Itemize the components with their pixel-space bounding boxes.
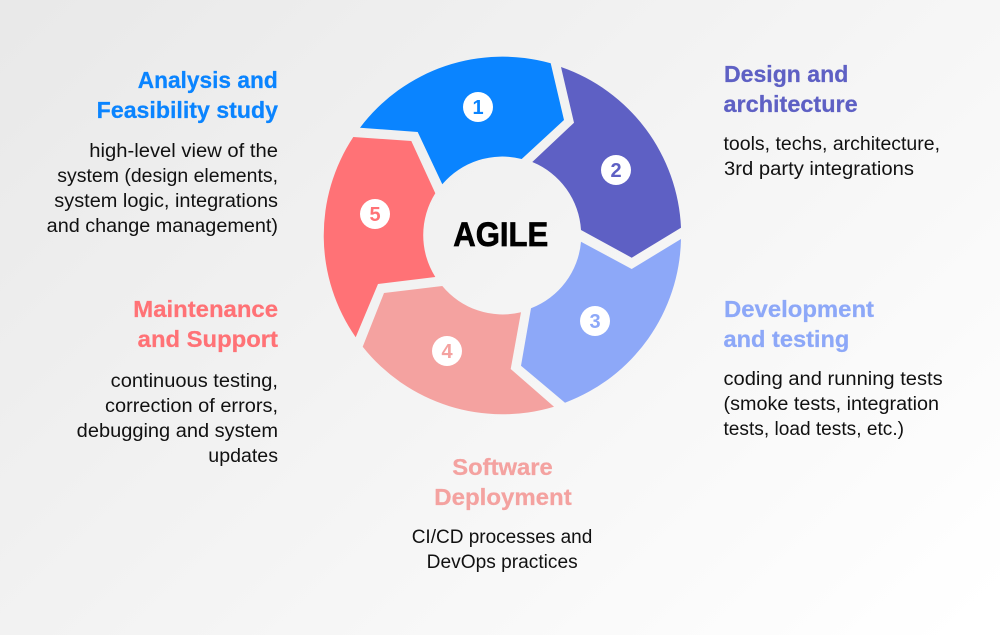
heading: deployment: Deployment bbox=[434, 484, 572, 510]
heading: design: Design and bbox=[724, 61, 848, 87]
body: deployment: DevOps practices bbox=[427, 552, 578, 573]
agile cycle diagram bbox=[324, 57, 681, 414]
heading: analysis bbox=[97, 67, 278, 123]
body: maintenance: updates bbox=[208, 446, 278, 467]
segment 3: development bbox=[521, 239, 681, 403]
body: analysis: system (design elements, bbox=[57, 166, 278, 187]
body: maintenance: correction of errors, bbox=[105, 396, 278, 417]
heading: analysis: Analysis and bbox=[138, 67, 278, 93]
body: maintenance bbox=[77, 371, 278, 467]
body: deployment bbox=[412, 527, 592, 573]
text block: software deployment bbox=[412, 454, 592, 573]
body: maintenance: continuous testing, bbox=[111, 371, 278, 392]
heading: deployment bbox=[434, 454, 572, 510]
heading: development: and testing bbox=[724, 326, 849, 352]
body: development: tests, load tests, etc.) bbox=[724, 419, 904, 440]
text block: development and testing bbox=[724, 296, 943, 440]
heading: maintenance: Maintenance bbox=[133, 296, 278, 322]
heading: development: Development bbox=[724, 296, 874, 322]
segment 3: development: 3 bbox=[589, 311, 601, 333]
segment 1: analysis: 1 bbox=[472, 97, 484, 119]
body: design: 3rd party integrations bbox=[724, 159, 914, 180]
center label: AGILE: AGILE bbox=[453, 216, 548, 254]
heading: design bbox=[724, 61, 858, 117]
text block: analysis and feasibility study bbox=[47, 67, 278, 237]
body: maintenance: debugging and system bbox=[77, 421, 278, 442]
text block: design and architecture bbox=[724, 61, 940, 180]
heading: deployment: Software bbox=[452, 454, 553, 480]
segment 4: deployment: 4 bbox=[441, 341, 453, 363]
body: development bbox=[724, 369, 943, 440]
segment 5: maintenance: 5 bbox=[369, 204, 381, 226]
body: analysis: high-level view of the bbox=[89, 141, 278, 162]
body: deployment: CI/CD processes and bbox=[412, 527, 592, 548]
heading: maintenance: and Support bbox=[138, 326, 278, 352]
body: analysis: system logic, integrations bbox=[54, 191, 278, 212]
heading: maintenance bbox=[133, 296, 278, 352]
body: design: tools, techs, architecture, bbox=[724, 134, 940, 155]
heading: analysis: Feasibility study bbox=[97, 97, 278, 123]
segment 2: design: 2 bbox=[610, 160, 622, 182]
heading: design: architecture bbox=[724, 91, 858, 117]
body: development: coding and running tests bbox=[724, 369, 943, 390]
body: analysis bbox=[47, 141, 278, 237]
segment 2: design bbox=[532, 67, 681, 258]
segment 4: deployment bbox=[363, 286, 554, 414]
body: development: (smoke tests, integration bbox=[724, 394, 939, 415]
segment 5: maintenance bbox=[324, 137, 435, 337]
body: design bbox=[724, 134, 940, 180]
segment 1: analysis bbox=[360, 57, 564, 184]
text block: maintenance and support bbox=[77, 296, 278, 467]
body: analysis: and change management) bbox=[47, 216, 278, 237]
heading: development bbox=[724, 296, 874, 352]
